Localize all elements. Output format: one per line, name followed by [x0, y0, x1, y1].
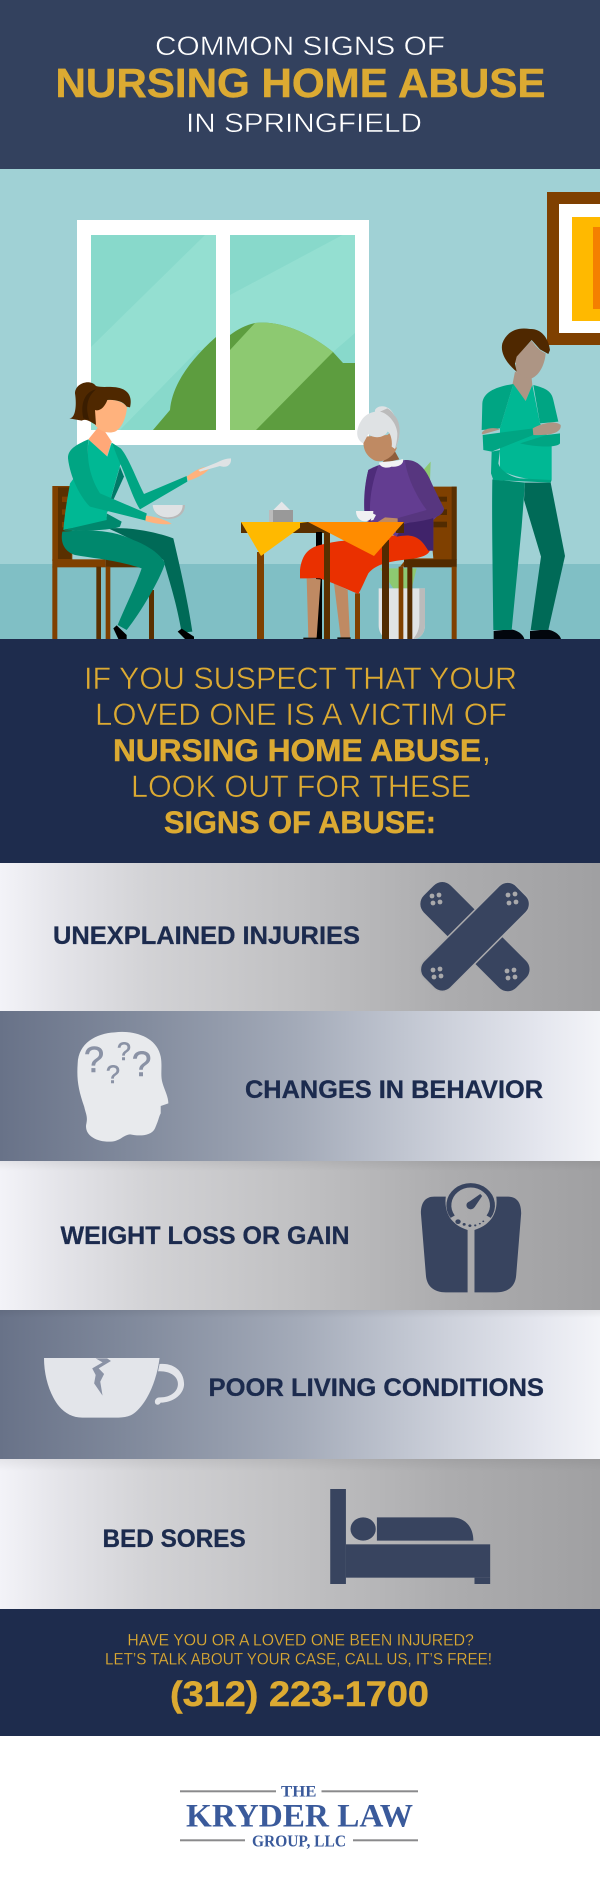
pants — [524, 483, 565, 630]
logo: the kryder law group: KRYDER LAW — [186, 1799, 413, 1835]
hands — [145, 467, 210, 524]
panel: poor living conditions — [0, 1310, 600, 1459]
panel: bed sores — [0, 1459, 600, 1609]
framed picture — [547, 192, 600, 345]
table back with yellow cloth — [241, 522, 404, 639]
front leg — [62, 530, 165, 630]
phone number: (312) 223-1700 — [170, 1675, 429, 1714]
plant — [379, 462, 431, 639]
logo: the kryder law group: GROUP, LLC — [252, 1832, 346, 1851]
label: POOR LIVING CONDITIONS — [208, 1375, 544, 1402]
call to action line 2: LET’S TALK ABOUT YOUR CASE, CALL US, IT’S FREE! — [105, 1649, 492, 1668]
neck — [382, 448, 399, 463]
logo: the kryder law group: THE — [281, 1784, 316, 1801]
torso — [63, 439, 121, 530]
label: WEIGHT LOSS OR GAIN — [60, 1223, 350, 1250]
table front with orange cloth and legs — [300, 522, 404, 639]
comma: , — [482, 732, 491, 768]
icon: head with question marks — [77, 1032, 168, 1142]
icon: head with question marks: ? — [132, 1045, 151, 1084]
tissue box — [269, 502, 293, 522]
icon: broken cup — [44, 1358, 184, 1418]
window — [77, 220, 369, 445]
near arm — [68, 439, 147, 521]
figure: seated nurse with chair — [52, 382, 231, 639]
back leg — [108, 528, 192, 633]
dress — [300, 533, 430, 594]
call to action line 1: HAVE YOU OR A LOVED ONE BEEN INJURED? — [127, 1631, 474, 1650]
figure: standing nurse — [482, 328, 565, 639]
panel: changes in behavior — [0, 1011, 600, 1161]
panel: intro statement — [0, 639, 600, 863]
illustration: nursing home scene — [0, 169, 600, 639]
hand — [377, 517, 398, 523]
teacup — [356, 511, 376, 521]
title line: nursing home abuse: NURSING HOME ABUSE — [56, 60, 546, 106]
figure: elderly woman with chair and plant — [300, 406, 457, 639]
hair — [357, 406, 399, 449]
bowl — [153, 505, 185, 519]
intro line 3 bold: NURSING HOME ABUSE — [113, 732, 481, 768]
face — [513, 341, 546, 378]
face — [93, 400, 127, 433]
panel: unexplained injuries — [0, 863, 600, 1011]
title line: common signs of: COMMON SIGNS OF — [155, 31, 445, 61]
logo: the kryder law group — [180, 1784, 418, 1851]
collar — [379, 459, 403, 468]
intro line 4: LOOK OUT FOR THESE — [131, 768, 471, 804]
neck — [512, 372, 532, 401]
label: BED SORES — [102, 1526, 246, 1553]
sweater — [364, 460, 444, 551]
crossed arms — [520, 433, 560, 446]
hair — [502, 328, 550, 372]
shoes — [113, 625, 194, 639]
title line: in springfield: IN SPRINGFIELD — [186, 108, 422, 138]
spoon — [198, 458, 231, 472]
icon: bathroom scale — [421, 1185, 521, 1292]
far arm shadow — [107, 467, 124, 513]
intro line 1: IF YOU SUSPECT THAT YOUR — [84, 660, 517, 696]
icon: crossed bandages — [415, 877, 535, 996]
icon: head with question marks: ? — [84, 1039, 104, 1080]
shoes — [494, 629, 561, 639]
panel: call to action — [0, 1609, 600, 1736]
waist — [63, 513, 122, 531]
intro line 5 bold: SIGNS OF ABUSE: — [164, 804, 436, 840]
panel: title header — [0, 0, 600, 169]
panel: weight loss or gain — [0, 1161, 600, 1310]
icon: head with question marks: ? — [117, 1038, 131, 1066]
chair — [355, 487, 457, 639]
label: CHANGES IN BEHAVIOR — [245, 1077, 543, 1104]
hair — [69, 382, 131, 425]
icon: head with question marks: ? — [106, 1061, 120, 1089]
legs — [307, 578, 350, 638]
far arm — [112, 443, 187, 509]
label: UNEXPLAINED INJURIES — [53, 923, 360, 950]
intro line 2: LOVED ONE IS A VICTIM OF — [95, 696, 507, 732]
chair — [52, 486, 154, 639]
neck — [88, 425, 112, 457]
scrub top — [500, 384, 552, 480]
face — [363, 432, 397, 461]
icon: person in bed — [330, 1489, 490, 1584]
